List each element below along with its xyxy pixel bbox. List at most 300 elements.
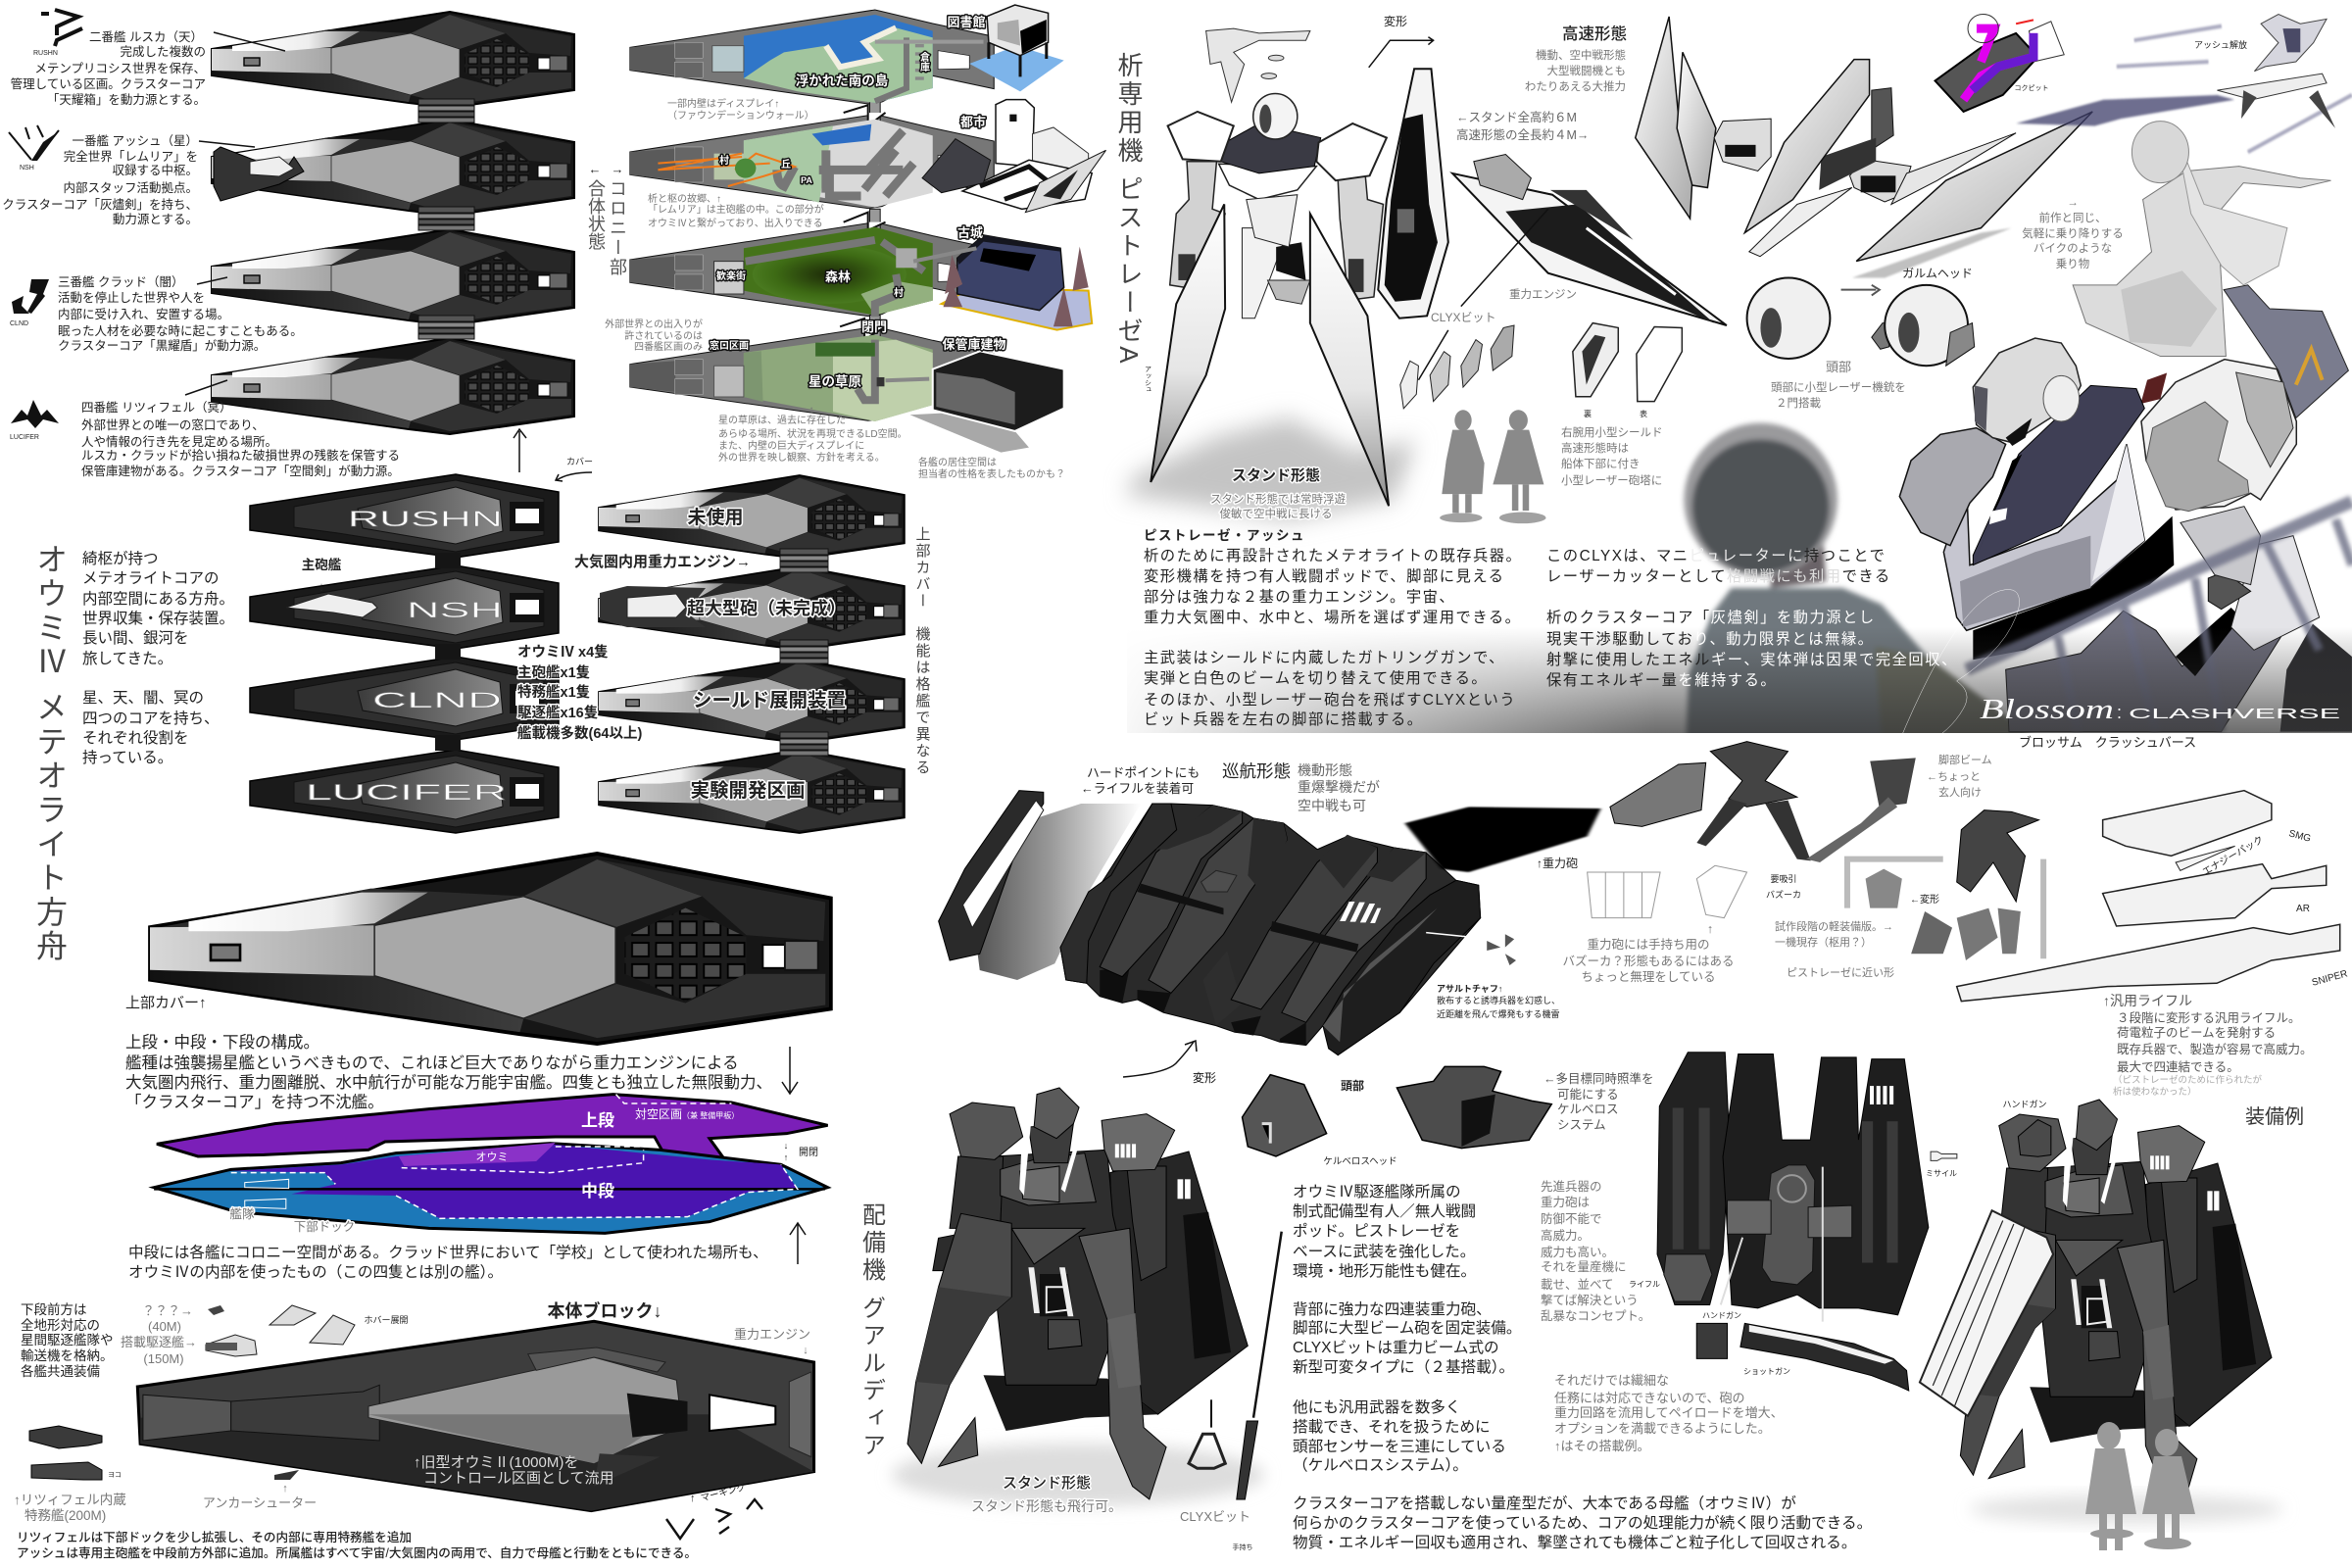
chest xyxy=(1221,123,1321,173)
prototype frame xyxy=(1847,859,2043,960)
labels on the colony worlds: 村 xyxy=(719,154,729,167)
notes on the colony: 「レムリア」は主砲艦の中。この部分が xyxy=(648,203,824,216)
shield with gatling gun xyxy=(1378,69,1448,318)
text: prototype note: 試作段階の軽装備版。→ xyxy=(1775,919,1893,933)
label: CLYX bit xyxy=(1180,1509,1252,1551)
illustration: girl and shield xyxy=(2073,122,2348,418)
text: old Oumi II control block xyxy=(414,1454,614,1487)
description: meteorite ark: 綺枢が持つ xyxy=(82,550,159,567)
text: ship three, Clad: 三番艦 クラッド（闇） xyxy=(58,274,183,289)
vertical labels: combined state and colony: 合体状態 xyxy=(586,179,606,250)
handwritten labels, heads and rider: アッシュ解放 xyxy=(2194,39,2247,50)
text: structure description: 「クラスターコア」を持つ不沈艦。 xyxy=(125,1093,384,1111)
text: payload note: それだけでは繊細な xyxy=(1554,1373,1669,1388)
heads of Gualdia xyxy=(1243,1066,1551,1156)
fast form booster xyxy=(1452,155,1727,325)
text: Gualdia description: 物質・エネルギー回収も適用され、撃墜されても機体ごと粒子化して回収される。 xyxy=(1293,1534,1856,1551)
labels on the colony worlds: 窓口区画 xyxy=(710,339,749,352)
text: Pistoreze Ash description: そのほか、小型レーザー砲台を飛ばすCLYXという xyxy=(1144,692,1516,709)
labels: rifle types: AR xyxy=(2296,904,2310,914)
text: prototype note xyxy=(1775,893,1939,979)
text: carried craft sizes: (40M) xyxy=(148,1319,181,1334)
labels on the colony worlds: 浮かれた南の島 xyxy=(796,73,888,88)
text: ship three, Clad: 内部に受け入れ、安置する場。 xyxy=(58,308,229,321)
title: Oumi IV meteorite ark: オウミⅣ メテオライト方舟 xyxy=(32,543,68,963)
shield behind shoulder xyxy=(2224,285,2348,418)
text: high speed form: 機動、空中戦形態 xyxy=(1536,48,1626,62)
illustration: rifle in hand xyxy=(1920,1119,2053,1416)
illustration: four stacked ark ships, upper left xyxy=(212,12,574,434)
text: ship one, Ash: 一番艦 アッシュ（星） xyxy=(73,133,198,148)
illustration: Gualdia backpack xyxy=(1657,1053,1957,1391)
text: bazooka note: バズーカ？形態もあるにはある xyxy=(1562,954,1735,968)
labels on side view: 中段 xyxy=(581,1182,614,1200)
label: gravity cannon: ↑重力砲 xyxy=(1537,857,1578,870)
labels: heads: 頭部 xyxy=(1341,1078,1364,1093)
text: advanced weapon concept: それを量産機に xyxy=(1541,1260,1627,1274)
arrow: cover goes up xyxy=(514,429,526,472)
description: meteorite ark: 持っている。 xyxy=(82,749,172,766)
fleet composition list: オウミⅣ x4隻 xyxy=(517,643,609,661)
CLYX bits xyxy=(1400,325,1514,409)
notes on the colony: 外部世界との出入りが xyxy=(605,318,703,330)
text: assault chaff: アサルトチャフ↑ xyxy=(1437,984,1502,994)
labels on module ships: シールド展開装置 xyxy=(693,690,846,711)
illustration: storage building xyxy=(886,351,1064,453)
labels on the colony worlds: 村 xyxy=(894,286,904,299)
text: CLYX and cluster core: 射撃に使用したエネルギー、実体弾は因果で完全回収、 xyxy=(1546,652,1958,668)
labels on side view xyxy=(229,1107,818,1234)
text: ship one, Ash: 内部スタッフ活動拠点。 xyxy=(63,181,198,195)
labels on the colony worlds: 丘 xyxy=(781,158,791,171)
labels on side view: 上段 xyxy=(581,1111,614,1130)
text: cruise form labels: ハードポイントにも xyxy=(1087,765,1200,780)
labels on the colony worlds: 保管庫建物 xyxy=(942,337,1006,352)
text: lower front section: 各艦共通装備 xyxy=(21,1363,100,1379)
text: ship one, Ash xyxy=(2,133,198,226)
label: upper cover: 上部カバー↑ xyxy=(125,995,207,1011)
title: Blossom Clashverse logo: : xyxy=(2117,703,2122,722)
scale silhouettes xyxy=(1440,410,1546,523)
text: high speed form xyxy=(1525,24,1627,93)
text: Pistoreze Ash description: 部分は強力な２基の重力エンジン。宇宙、 xyxy=(1144,589,1455,606)
text: ship three, Clad: 眠った人材を必要な時に起こすこともある。 xyxy=(58,324,303,338)
text: stand form: 俊敏で空中戦に長ける xyxy=(1219,507,1333,520)
scene: floor shading xyxy=(1127,627,2352,733)
text: Pistoreze Ash description xyxy=(1144,527,1522,728)
labels: rifle types xyxy=(2200,828,2349,989)
mini mech standing xyxy=(1957,810,2038,902)
labels on side view: 対空区画（兼 整備甲板） xyxy=(635,1107,739,1121)
torso xyxy=(1219,164,1316,318)
column B xyxy=(1100,806,1243,977)
text: leg beam: ←ちょっと xyxy=(1927,770,1981,783)
illustration: city buildings xyxy=(922,100,1106,213)
text: leg beam xyxy=(1927,753,1992,799)
labels on the colony worlds: 古城 xyxy=(957,225,983,240)
text: CLYX and cluster core: レーザーカッターとして格闘戦にも利用できる xyxy=(1546,568,1891,585)
text: bike note: 前作と同じ、 xyxy=(2038,211,2107,224)
rifle SNIPER xyxy=(1957,924,2340,1002)
callout lines to ships xyxy=(185,32,285,395)
label: gravity engine: 重力エンジン xyxy=(734,1327,810,1342)
icon and label: anchor shooter xyxy=(203,1470,317,1510)
illustration: old castle with trees xyxy=(913,235,1092,330)
title: Blossom Clashverse logo: Blossom xyxy=(1980,695,2114,725)
scale silhouettes: equipment example xyxy=(2085,1422,2195,1550)
gravity cannon black xyxy=(1404,807,1601,872)
bazooka sketch xyxy=(1588,865,1747,918)
world: floating south island xyxy=(712,15,933,103)
text: carried craft sizes xyxy=(121,1303,197,1366)
text: structure description: 上段・中段・下段の構成。 xyxy=(125,1033,319,1052)
text: cruise form labels: 重爆撃機だが xyxy=(1298,779,1380,795)
illustration: Pistoreze stand form xyxy=(1123,28,1727,523)
transform arrow xyxy=(1369,37,1434,68)
text: Gualdia description: ベースに武装を強化した。 xyxy=(1293,1243,1475,1260)
label: gravity cannon: バズーカ xyxy=(1766,889,1801,900)
label: vertical title Gualdia: 配備機 グアルディア xyxy=(858,1202,886,1460)
text: lower front section: 全地形対応の xyxy=(21,1318,100,1333)
notes on the colony: 析と枢の故郷、↑ xyxy=(648,192,721,205)
text: stand form xyxy=(1210,466,1346,520)
notes on the colony: また、内壁の巨大ディスプレイに xyxy=(718,439,864,452)
fleet composition list: 駆逐艦x16隻 xyxy=(517,704,598,721)
icon: Clad emblem xyxy=(10,279,49,327)
outer right column xyxy=(1323,880,1481,1055)
right shoulder and hand xyxy=(2141,360,2296,512)
labels on module ships: 未使用 xyxy=(687,507,744,528)
illustration: main body block xyxy=(137,1321,814,1511)
scene: blurred person, mech and floor shading xyxy=(1127,122,2352,755)
text: stand form Gualdia xyxy=(971,1474,1122,1514)
title: Blossom Clashverse logo: CLASHVERSE xyxy=(2129,706,2340,722)
text: special ship label xyxy=(14,1493,126,1523)
text: structure description: 艦種は強襲揚星艦というべきもので、これほど巨大でありながら重力エンジンによる xyxy=(125,1054,739,1072)
text: Pistoreze Ash description: 重力大気圏中、水中と、場所を選ばず運用できる。 xyxy=(1144,610,1521,626)
notes on the colony xyxy=(605,97,1065,480)
label: CLYX bit: CLYXビット xyxy=(1431,311,1495,324)
footnote xyxy=(17,1530,697,1560)
text: Cerberus system: 可能にする xyxy=(1557,1087,1619,1102)
markings: emblems: マーキング xyxy=(700,1481,748,1504)
labels: weapons: ハンドガン xyxy=(2002,1100,2047,1109)
mech forearm xyxy=(2208,536,2320,650)
text: payload note: オプションを満載できるようにした。 xyxy=(1554,1421,1771,1436)
label: cover arrow: カバー xyxy=(566,457,593,466)
text: ship four, Lucifer xyxy=(81,400,400,478)
description: meteorite ark: それぞれ役割を xyxy=(82,729,189,747)
illustration: fast form fighter xyxy=(1636,15,2352,366)
rifle AR xyxy=(2103,864,2327,926)
text: CLYX and cluster core: このCLYXは、マニピュレーターに持つことで xyxy=(1546,548,1886,564)
text: lower front section xyxy=(21,1301,114,1379)
text: cruise form labels xyxy=(1081,761,1380,813)
text: small shield: 小型レーザー砲塔に xyxy=(1561,473,1662,487)
labels: weapons: ライフル xyxy=(1629,1280,1660,1289)
cockpit diagram xyxy=(1936,15,2064,112)
handwritten labels, heads and rider: ２門搭載 xyxy=(1776,397,1821,410)
description: meteorite ark: メテオライトコアの xyxy=(82,570,220,587)
label: main cannon ship: 主砲艦 xyxy=(302,557,342,572)
notes on the colony: 一部内壁はディスプレイ↑ xyxy=(667,97,779,110)
cover ships: inner modules column xyxy=(599,475,905,833)
illustration: large Pistoreze mech xyxy=(1899,338,2352,732)
text: leg beam: 玄人向け xyxy=(1938,785,1982,799)
labels on the colony worlds: 星の草原 xyxy=(808,374,861,389)
labels: weapons: ハンドガン xyxy=(1702,1310,1741,1320)
cover ships: dark logos column: CLND xyxy=(372,688,502,712)
text: carried craft sizes: ？？？→ xyxy=(142,1303,193,1318)
notes on the colony: 四番艦区画のみ xyxy=(634,340,703,353)
text: high speed form: 大型戦闘機とも xyxy=(1546,64,1626,77)
labels on the colony worlds: 都市 xyxy=(960,115,986,129)
text: ship two, Ruska: 「天耀箱」を動力源とする。 xyxy=(47,92,206,107)
mech lower body xyxy=(2005,608,2352,733)
column D xyxy=(1231,835,1377,1009)
text: bike note: 乗り物 xyxy=(2056,257,2089,270)
world: home town of Lemuria xyxy=(658,120,933,208)
notes on the colony: 外の世界を映し観察、方針を考える。 xyxy=(718,451,885,464)
text: stand form: スタンド形態 xyxy=(1232,466,1320,484)
description: meteorite ark: 内部空間にある方舟。 xyxy=(82,590,234,608)
text: stand form: スタンド形態では常時浮遊 xyxy=(1210,492,1346,506)
small flyer xyxy=(1206,28,1310,102)
dark bands xyxy=(1137,884,1358,953)
label: vertical title Pistoreze A: アッシュ xyxy=(1145,366,1152,393)
description: meteorite ark: 世界収集・保存装置。 xyxy=(82,610,234,627)
heads xyxy=(1747,278,1975,366)
text: small shield: 裏 xyxy=(1584,409,1592,418)
text: payload note: 任務には対応できないので、砲の xyxy=(1554,1391,1744,1405)
text: Pistoreze Ash description: 変形機構を持つ有人戦闘ポッドで、脚部に見える xyxy=(1144,568,1504,585)
labels on the colony worlds: PA xyxy=(801,175,812,185)
text: ship three, Clad xyxy=(58,274,303,353)
labels on module ships: 大気圏内用重力エンジン→ xyxy=(574,553,751,570)
text: prototype note: ピストレーゼに近い形 xyxy=(1787,966,1894,979)
labels on module ships xyxy=(574,507,846,802)
label: gravity engine xyxy=(734,1327,810,1356)
label: main body block: 本体ブロック↓ xyxy=(547,1300,662,1321)
text: advanced weapon concept: 載せ、並べて xyxy=(1541,1278,1614,1292)
label: cover arrow xyxy=(556,457,593,481)
text: payload note: 重力回路を流用してペイロードを増大、 xyxy=(1554,1405,1784,1420)
text: advanced weapon concept: 威力も高い。 xyxy=(1541,1245,1614,1259)
labels: weapons xyxy=(1629,1100,2047,1376)
notes on the colony: ↑ xyxy=(809,405,813,416)
text: general purpose rifle: 最大で四連結できる。 xyxy=(2117,1060,2239,1074)
text: Gualdia description: 脚部に大型ビーム砲を固定装備。 xyxy=(1293,1319,1521,1337)
dark backing mass xyxy=(1060,804,1481,1055)
illustration: Gualdia stand form xyxy=(907,1088,1248,1499)
text: high speed form: わたりあえる大推力 xyxy=(1525,79,1626,93)
illustration: library building xyxy=(875,5,1064,91)
faded left columns xyxy=(939,791,1141,980)
torso plates xyxy=(1943,444,2144,630)
text: prototype note: 一機現存（枢用？） xyxy=(1775,935,1872,949)
notes on the colony: 星の草原は、過去に存在した xyxy=(718,414,846,426)
description: meteorite ark xyxy=(82,550,234,766)
text: general purpose rifle xyxy=(2103,993,2313,1098)
icons: special ship of Lucifer xyxy=(29,1426,122,1480)
cover ships: dark logos column xyxy=(250,474,559,833)
icon: Lucifer emblem xyxy=(10,400,59,441)
illustration: colony cross sections xyxy=(630,10,994,421)
handwritten labels, heads and rider: 頭部に小型レーザー機銃を xyxy=(1771,380,1906,394)
head xyxy=(1973,338,2081,446)
girl in school uniform xyxy=(2073,122,2331,404)
labels on side view: 艦隊 xyxy=(229,1206,255,1221)
left shoulder xyxy=(1899,428,2006,546)
column A xyxy=(1060,804,1177,983)
text: Gualdia description: CLYXビットは重力ビーム式の xyxy=(1293,1339,1499,1356)
text: Gualdia description: 制式配備型有人／無人戦闘 xyxy=(1293,1202,1476,1220)
text: Gualdia description: （ケルベロスシステム）。 xyxy=(1293,1456,1468,1474)
text: advanced weapon concept: 高威力。 xyxy=(1541,1228,1590,1243)
handwritten label: transform: 変形 xyxy=(1384,14,1407,28)
icon: Ruska emblem xyxy=(33,10,82,57)
text: assault chaff: 散布すると誘導兵器を幻惑し、 xyxy=(1437,995,1560,1005)
column E xyxy=(1282,848,1426,1022)
label: CLYX bit: 手持ち xyxy=(1233,1543,1252,1551)
labels on side view: ↓ xyxy=(784,1141,788,1151)
fleet composition list: 主砲艦x1隻 xyxy=(517,663,590,681)
mini mech dark xyxy=(1610,742,1811,860)
text: general purpose rifle: （ピストレーゼのために作られたが xyxy=(2113,1074,2263,1086)
text: colony note: 中段には各艦にコロニー空間がある。クラッド世界において「学校」として使われた場所も、 xyxy=(128,1244,768,1261)
icon: Clad emblem: CLND xyxy=(10,320,28,327)
text: prototype note: ←変形 xyxy=(1910,893,1939,906)
fleet composition list: 艦載機多数(64以上) xyxy=(517,724,642,742)
vertical labels: combined state and colony: コロニー部 xyxy=(608,179,627,277)
labels on module ships: 超大型砲（未完成） xyxy=(687,598,846,618)
text: Cerberus system: ←多目標同時照準を xyxy=(1544,1071,1654,1086)
scene: blurred foreground person xyxy=(1684,423,2045,755)
description: meteorite ark: 旅してきた。 xyxy=(82,650,172,667)
text: general purpose rifle: ３段階に変形する汎用ライフル。 xyxy=(2117,1010,2301,1025)
text: ship two, Ruska xyxy=(11,29,206,107)
vertical labels: combined state and colony xyxy=(586,162,627,277)
text: Gualdia description: 搭載でき、それを扱うために xyxy=(1293,1418,1491,1436)
text: general purpose rifle: 析は使わなかった） xyxy=(2113,1086,2197,1098)
labels: heads xyxy=(1323,1078,1397,1167)
text: advanced weapon concept: 重力砲は xyxy=(1541,1195,1590,1209)
text: advanced weapon concept: 先進兵器の xyxy=(1541,1180,1602,1194)
text: Gualdia description: ポッド。ピストレーゼを xyxy=(1293,1222,1460,1240)
text: Pistoreze Ash description: ビット兵器を左右の脚部に搭載する。 xyxy=(1144,711,1424,728)
label: main cannon ship: ↓ xyxy=(318,579,324,594)
diagram: purple and blue side view xyxy=(154,1095,828,1233)
beam streak xyxy=(2016,26,2352,152)
text: small shield: 右腕用小型シールド xyxy=(1561,425,1662,439)
text: ship four, Lucifer: 四番艦 リツィフェル（冥） xyxy=(81,400,231,415)
notes on the colony: あらゆる場所、状況を再現できるLD空間。 xyxy=(718,427,907,440)
text: special ship label: 特務艦(200M) xyxy=(24,1507,106,1523)
arrow: transform: 変形 xyxy=(1193,1070,1216,1085)
vertical labels: combined state and colony: → xyxy=(612,162,623,176)
chest xyxy=(1973,385,2144,565)
text: Gualdia description: クラスターコアを搭載しない量産型だが、大本である母艦（オウミⅣ）が xyxy=(1293,1494,1796,1512)
text: cruise form labels: ←ライフルを装着可 xyxy=(1081,781,1194,796)
icons: special ship of Lucifer: ヨコ xyxy=(108,1471,122,1479)
label: main cannon ship xyxy=(302,557,342,594)
markings: emblems: ↑ xyxy=(690,1493,696,1504)
notes on the colony: 担当者の性格を表したものかも？ xyxy=(918,467,1065,480)
labels on side view: 下部ドック xyxy=(294,1220,355,1234)
text: small shield: 表 xyxy=(1640,409,1647,418)
text: cruise form labels: 空中戦も可 xyxy=(1298,798,1366,813)
bike rider mini mech xyxy=(2217,15,2335,128)
labels: heads: ケルベロスヘッド xyxy=(1323,1156,1397,1167)
engine pods xyxy=(1714,119,1911,202)
text: ship one, Ash: 完全世界「レムリア」を xyxy=(64,150,198,164)
label: CLYX bit: CLYXビット xyxy=(1180,1509,1250,1524)
vertical note: upper cover: 上部カバー 機能は格艦で異なる xyxy=(913,526,931,776)
vertical labels: combined state and colony: ← xyxy=(588,162,602,176)
labels on the colony worlds xyxy=(710,15,1006,389)
icon and label: anchor shooter: ↑ xyxy=(282,1483,288,1494)
icon: Lucifer emblem: LUCIFER xyxy=(10,434,39,441)
labels: rifle types: SNIPER xyxy=(2311,968,2349,989)
cover ships: dark logos column: LUCIFER xyxy=(306,780,507,805)
text: advanced weapon concept xyxy=(1541,1180,1650,1323)
text: CLYX and cluster core: 保有エネルギー量を維持する。 xyxy=(1546,672,1777,689)
text: leg beam: 脚部ビーム xyxy=(1938,753,1992,766)
icon and label: anchor shooter: アンカーシューター xyxy=(203,1495,317,1510)
text: general purpose rifle: 荷電粒子のビームを発射する xyxy=(2117,1025,2276,1040)
world: forest xyxy=(714,227,933,317)
icon: Ash emblem: NSH xyxy=(20,165,34,172)
text: CLYX and cluster core: 析のクラスターコア「灰燼剣」を動力源とし xyxy=(1546,610,1876,626)
chaff icons xyxy=(1487,934,1516,965)
text: size comparison: ←スタンド全高約６M xyxy=(1456,110,1577,124)
text: ship one, Ash: クラスターコア「灰燼剣」を持ち、 xyxy=(2,197,198,212)
text: lower front section: 輸送機を格納。 xyxy=(21,1348,114,1363)
text: bazooka note: ↑ xyxy=(1707,922,1713,936)
text: ship four, Lucifer: 保管庫建物がある。クラスターコア「空間剣」が動力源。 xyxy=(81,464,400,478)
text: Gualdia description: 環境・地形万能性も健在。 xyxy=(1293,1262,1476,1280)
text: CLYX and cluster core xyxy=(1546,548,1958,689)
text: Gualdia description: オウミⅣ駆逐艦隊所属の xyxy=(1293,1183,1461,1200)
arrow: transform xyxy=(1123,1041,1216,1085)
text: Gualdia description: 他にも汎用武器を数多く xyxy=(1293,1398,1461,1416)
text: assault chaff: 近距離を飛んで爆発もする機雷 xyxy=(1437,1008,1560,1019)
labels on the colony worlds: 倉庫 xyxy=(917,51,929,73)
text: Gualdia description: 頭部センサーを三連にしている xyxy=(1293,1438,1506,1455)
label: gravity cannon xyxy=(1537,857,1801,900)
text: bike note xyxy=(2022,197,2124,270)
text: advanced weapon concept: 防御不能で xyxy=(1541,1211,1602,1226)
label: gravity engine: ↓ xyxy=(803,1345,808,1356)
icons: small craft xyxy=(206,1305,409,1356)
rifle SMG xyxy=(2103,791,2272,870)
text: carried craft sizes: (150M) xyxy=(143,1351,184,1366)
icon: Ruska emblem: RUSHN xyxy=(33,50,58,57)
labels: rifle types: エナジーパック xyxy=(2200,834,2266,878)
text: cruise form labels: 機動形態 xyxy=(1298,762,1352,778)
text: size comparison xyxy=(1456,110,1589,142)
missile xyxy=(1931,1152,1957,1160)
text: bike note: バイクのような xyxy=(2034,242,2112,255)
text: Gualdia description: 新型可変タイプに（２基搭載）。 xyxy=(1293,1358,1514,1376)
head xyxy=(1253,93,1298,139)
marking xyxy=(1340,902,1381,923)
arrows: exploded view xyxy=(782,1047,806,1264)
labels on the colony worlds: 図書館 xyxy=(947,15,986,29)
text: old Oumi II control block: ↑旧型オウミⅡ(1000M)を xyxy=(414,1454,578,1471)
text: ship two, Ruska: 二番艦 ルスカ（天） xyxy=(89,29,203,44)
text: payload note xyxy=(1554,1373,1784,1453)
